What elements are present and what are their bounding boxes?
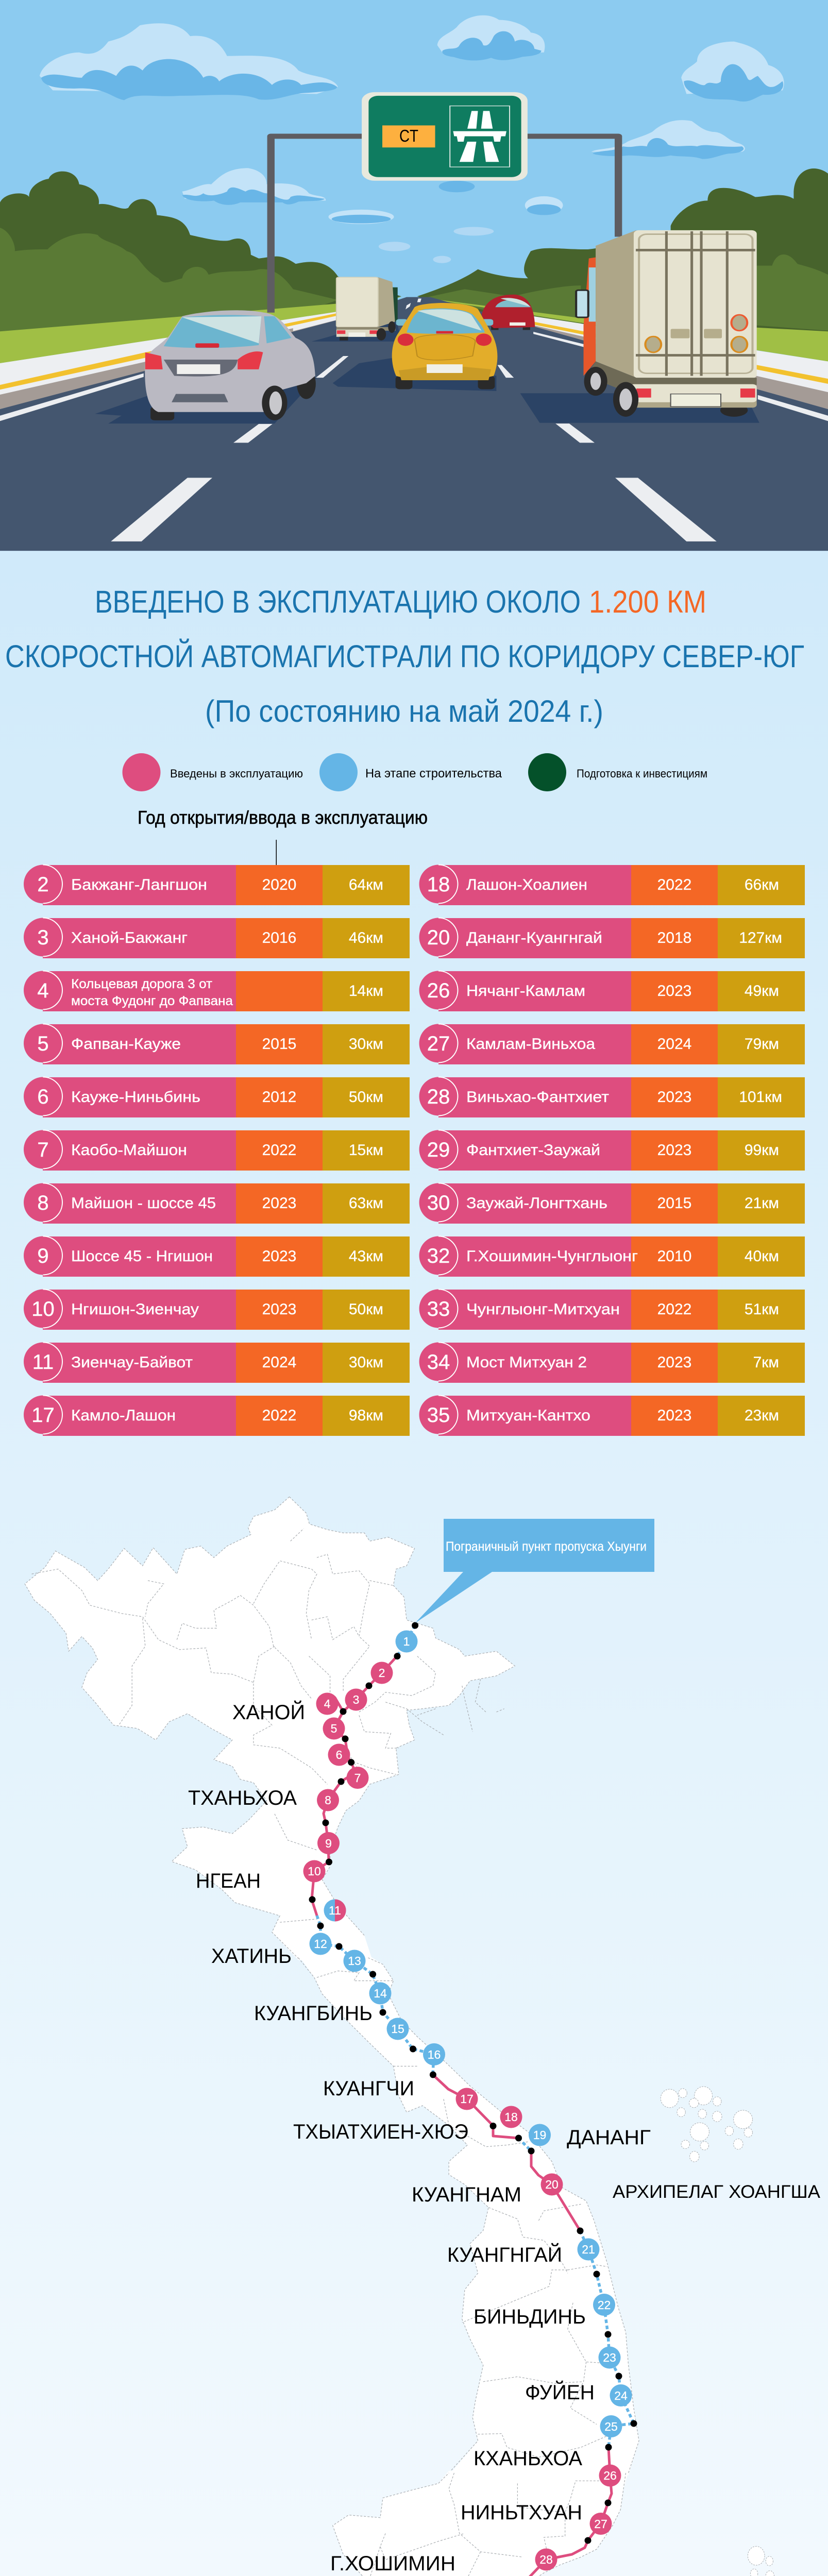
row 35 xyxy=(419,1395,805,1436)
map of Vietnam xyxy=(25,1497,814,2576)
row 30: 30 xyxy=(427,1192,450,1214)
marker 24: 24 xyxy=(614,2389,628,2402)
map section markers xyxy=(283,1630,632,2576)
islands: Truong Sa archipelago xyxy=(682,2546,814,2576)
row 4 xyxy=(24,971,410,1011)
row 4: Кольцевая дорога 3 от xyxy=(71,977,213,991)
row 9: 9 xyxy=(37,1245,49,1267)
big truck xyxy=(520,230,759,423)
row 32: 2010 xyxy=(657,1248,691,1265)
marker 25 xyxy=(600,2415,622,2437)
row 26: 49км xyxy=(745,982,779,999)
marker 6 xyxy=(328,1743,350,1766)
province labels: КУАНГЧИ xyxy=(323,2077,414,2100)
marker 19 xyxy=(529,2124,551,2146)
title: (По состоянию на май 2024 г.) xyxy=(205,694,603,728)
province labels: Г.ХОШИМИН xyxy=(330,2552,455,2575)
marker 26: 26 xyxy=(603,2469,617,2482)
row 29 xyxy=(419,1130,805,1171)
row 8: 8 xyxy=(37,1192,49,1214)
marker 18: 18 xyxy=(504,2110,518,2124)
marker 8: 8 xyxy=(325,1793,331,1807)
marker 21 xyxy=(577,2238,600,2261)
marker 22: 22 xyxy=(598,2298,611,2312)
hero illustration: highway scene xyxy=(0,0,828,551)
province labels xyxy=(188,1700,821,2576)
row 7: Каобо-Майшон xyxy=(71,1142,187,1159)
row 3 xyxy=(24,918,410,958)
row 18: Лашон-Хоалиен xyxy=(466,876,587,893)
row 18: 66км xyxy=(745,876,779,893)
row 20: 20 xyxy=(427,926,450,949)
row 8 xyxy=(24,1183,410,1224)
marker 16: 16 xyxy=(428,2048,441,2061)
marker 2: 2 xyxy=(379,1666,385,1680)
row 10 xyxy=(24,1289,410,1330)
row 17: 2022 xyxy=(262,1407,296,1424)
row 10: 50км xyxy=(349,1301,383,1318)
marker 4 xyxy=(316,1693,338,1715)
row 5 xyxy=(24,1024,410,1064)
row 29: Фантхиет-Заужай xyxy=(466,1142,600,1159)
row 26: 2023 xyxy=(657,982,691,999)
row 29: 99км xyxy=(745,1142,779,1159)
row 5: 2015 xyxy=(262,1036,296,1053)
province labels: АРХИПЕЛАГ ХОАНГША xyxy=(613,2182,821,2202)
province labels: ТХЫАТХИЕН-ХЮЭ xyxy=(293,2121,468,2143)
marker 15 xyxy=(386,2018,409,2040)
row 9: 2023 xyxy=(262,1248,296,1265)
expressway route lines xyxy=(273,1625,634,2576)
road sign CT xyxy=(362,92,528,181)
callout: Huu Nghi border gate xyxy=(415,1519,654,1623)
row 27: 27 xyxy=(427,1032,450,1055)
marker 26 xyxy=(599,2465,621,2486)
marker 25: 25 xyxy=(604,2420,618,2433)
row 6: 2012 xyxy=(262,1089,296,1106)
silver car xyxy=(95,310,317,423)
row 33 xyxy=(419,1289,805,1330)
province labels: ДАНАНГ xyxy=(567,2126,651,2149)
row 2: 2 xyxy=(37,873,49,896)
row 11 xyxy=(24,1343,410,1383)
row 34: 2023 xyxy=(657,1354,691,1371)
row 2 xyxy=(24,865,410,905)
row 5: Фапван-Кауже xyxy=(71,1036,181,1053)
marker 9 xyxy=(317,1832,340,1854)
marker 3: 3 xyxy=(353,1693,359,1706)
row 2: Бакжанг-Лангшон xyxy=(71,876,207,893)
row 11: 30км xyxy=(349,1354,383,1371)
marker 22 xyxy=(593,2294,615,2316)
row 3: 46км xyxy=(349,929,383,946)
row 28: Виньхао-Фантхиет xyxy=(466,1089,609,1106)
marker 4: 4 xyxy=(324,1697,331,1710)
marker 17: 17 xyxy=(460,2092,474,2106)
marker 12 xyxy=(309,1933,332,1955)
marker 23: 23 xyxy=(603,2351,616,2364)
row 32: 32 xyxy=(427,1245,450,1267)
marker 3 xyxy=(345,1689,367,1710)
marker 11 half pink half blue xyxy=(324,1899,346,1922)
province labels: ХАТИНЬ xyxy=(211,1945,292,1968)
province labels: НИНЬТХУАН xyxy=(461,2501,582,2524)
marker 16 xyxy=(423,2043,445,2065)
row 17: 98км xyxy=(349,1407,383,1424)
row 26 xyxy=(419,971,805,1011)
marker 15: 15 xyxy=(391,2022,404,2036)
row 11: 2024 xyxy=(262,1354,296,1371)
row 6: Кауже-Ниньбинь xyxy=(71,1089,200,1106)
row 27: 79км xyxy=(745,1036,779,1053)
marker 17 xyxy=(455,2088,478,2110)
overhead sign gantry xyxy=(271,92,618,313)
marker 28: 28 xyxy=(539,2553,553,2566)
legend: На этапе строительства xyxy=(365,767,502,781)
row 20: 2018 xyxy=(657,929,691,946)
province labels: КХАНЬХОА xyxy=(474,2447,582,2470)
legend: Введены в эксплуатацию xyxy=(170,767,303,780)
row 26: Нячанг-Камлам xyxy=(466,982,585,999)
row 3: 3 xyxy=(37,926,49,949)
red car xyxy=(482,295,535,330)
row 4: 14км xyxy=(349,982,383,999)
province labels: КУАНГНАМ xyxy=(412,2183,521,2206)
row 10: Нгишон-Зиенчау xyxy=(71,1301,199,1318)
row 11: Зиенчау-Байвот xyxy=(71,1354,193,1371)
row 29: 29 xyxy=(427,1139,450,1161)
marker 18 xyxy=(500,2106,522,2128)
row 11: 11 xyxy=(32,1351,54,1374)
row 6: 6 xyxy=(37,1086,49,1108)
row 18: 18 xyxy=(427,873,450,896)
row 32: Г.Хошимин-Чунглыонг xyxy=(466,1248,638,1265)
marker 13 xyxy=(343,1950,366,1972)
marker 8 xyxy=(317,1789,339,1811)
row 7: 7 xyxy=(37,1139,49,1161)
row 34: Мост Митхуан 2 xyxy=(466,1354,587,1371)
row 5: 30км xyxy=(349,1036,383,1053)
row 26: 26 xyxy=(427,979,450,1002)
row 17: Камло-Лашон xyxy=(71,1407,176,1424)
callout: Huu Nghi border gate: Пограничный пункт пропуска Хыунги xyxy=(446,1539,647,1554)
title xyxy=(5,584,804,728)
row 35: 2023 xyxy=(657,1407,691,1424)
marker 14 xyxy=(369,1982,392,2004)
row 27 xyxy=(419,1024,805,1064)
row 9: 43км xyxy=(349,1248,383,1265)
row 20: 127км xyxy=(739,929,782,946)
row 33: Чунглыонг-Митхуан xyxy=(466,1301,620,1318)
small truck xyxy=(312,277,401,342)
row 35: Митхуан-Кантхо xyxy=(466,1407,590,1424)
marker 7: 7 xyxy=(354,1771,361,1785)
road surface with lane markings xyxy=(0,297,828,551)
row 28: 28 xyxy=(427,1086,450,1108)
province labels: БИНЬДИНЬ xyxy=(474,2306,586,2328)
marker 10 xyxy=(303,1860,326,1883)
marker 7 xyxy=(346,1767,369,1789)
row 29: 2023 xyxy=(657,1142,691,1159)
province labels: КУАНГНГАЙ xyxy=(447,2243,562,2266)
marker 27: 27 xyxy=(594,2517,607,2531)
row 27: Камлам-Виньхоа xyxy=(466,1036,595,1053)
table: sections in operation xyxy=(24,865,805,1436)
province labels: ТХАНЬХОА xyxy=(188,1787,297,1809)
row 8: Майшон - шоссе 45 xyxy=(71,1195,216,1212)
completed route sections (pink) xyxy=(312,1656,612,2576)
tree lines xyxy=(0,168,828,340)
heading: year of opening: Год открытия/ввода в эксплуатацию xyxy=(138,807,428,828)
row 27: 2024 xyxy=(657,1036,691,1053)
marker 1 xyxy=(396,1630,417,1653)
province labels: ФУЙЕН xyxy=(525,2380,595,2404)
clouds xyxy=(40,15,784,263)
marker 24 xyxy=(610,2384,632,2406)
row 2: 2020 xyxy=(262,876,296,893)
row 17 xyxy=(24,1395,410,1436)
row 34: 7км xyxy=(753,1354,779,1371)
row 32 xyxy=(419,1236,805,1277)
marker 6: 6 xyxy=(336,1748,342,1761)
row 8: 63км xyxy=(349,1195,383,1212)
row 2: 64км xyxy=(349,876,383,893)
row 30: 21км xyxy=(745,1195,779,1212)
row 3: Ханой-Бакжанг xyxy=(71,929,188,946)
marker 27 xyxy=(589,2513,612,2535)
province labels: КУАНГБИНЬ xyxy=(254,2002,373,2025)
row 20 xyxy=(419,918,805,958)
legend: Подготовка к инвестициям xyxy=(577,767,707,780)
row 4: 4 xyxy=(37,979,49,1002)
row 34: 34 xyxy=(427,1351,450,1374)
marker 14: 14 xyxy=(374,1987,387,2000)
row 4: моста Фудонг до Фапвана xyxy=(71,994,233,1008)
row 20: Дананг-Куангнгай xyxy=(466,929,602,946)
marker 5: 5 xyxy=(331,1722,337,1735)
row 33: 33 xyxy=(427,1298,450,1320)
row 32: 40км xyxy=(745,1248,779,1265)
row 34 xyxy=(419,1343,805,1383)
row 6 xyxy=(24,1077,410,1117)
marker 23 xyxy=(599,2346,620,2369)
sections under construction (blue dashed) xyxy=(273,1625,634,2576)
row 8: 2023 xyxy=(262,1195,296,1212)
legend xyxy=(123,753,707,791)
grass and road shoulders xyxy=(0,297,828,409)
title: 1.200 КМ xyxy=(589,584,706,619)
row 10: 2023 xyxy=(262,1301,296,1318)
row 10: 10 xyxy=(31,1298,55,1320)
marker 2 xyxy=(371,1662,393,1684)
marker 9: 9 xyxy=(325,1837,332,1850)
row 9: Шоссе 45 - Нгишон xyxy=(71,1248,213,1265)
row 35: 35 xyxy=(427,1404,450,1427)
marker 28 xyxy=(535,2548,557,2571)
marker 21: 21 xyxy=(582,2243,595,2256)
marker 11 half pink half blue: 11 xyxy=(329,1904,341,1917)
row 30: 2015 xyxy=(657,1195,691,1212)
marker 19: 19 xyxy=(533,2128,546,2142)
yellow car xyxy=(333,303,497,391)
province labels: ХАНОЙ xyxy=(232,1700,305,1724)
title: ВВЕДЕНО В ЭКСПЛУАТАЦИЮ ОКОЛО xyxy=(95,584,581,619)
marker 20 xyxy=(541,2173,563,2196)
row 7 xyxy=(24,1130,410,1171)
row 28: 101км xyxy=(739,1089,782,1106)
row 33: 51км xyxy=(745,1301,779,1318)
marker 5 xyxy=(323,1718,345,1739)
row 35: 23км xyxy=(745,1407,779,1424)
marker 13: 13 xyxy=(348,1954,361,1968)
row 17: 17 xyxy=(31,1404,55,1427)
sign label CT: CT xyxy=(399,126,418,145)
islands: Hoang Sa archipelago xyxy=(661,2087,752,2162)
marker 1: 1 xyxy=(403,1635,410,1648)
row 9 xyxy=(24,1236,410,1277)
row 18: 2022 xyxy=(657,876,691,893)
row 6: 50км xyxy=(349,1089,383,1106)
row 3: 2016 xyxy=(262,929,296,946)
route junction dots xyxy=(269,1622,637,2576)
row 30: Заужай-Лонгтхань xyxy=(466,1195,607,1212)
row 7: 15км xyxy=(349,1142,383,1159)
row 33: 2022 xyxy=(657,1301,691,1318)
row 5: 5 xyxy=(37,1032,49,1055)
row 30 xyxy=(419,1183,805,1224)
province labels: НГЕАН xyxy=(196,1870,261,1892)
marker 10: 10 xyxy=(308,1865,321,1878)
marker 20: 20 xyxy=(545,2178,559,2191)
marker 12: 12 xyxy=(314,1937,327,1951)
row 7: 2022 xyxy=(262,1142,296,1159)
row 28 xyxy=(419,1077,805,1117)
row 28: 2023 xyxy=(657,1089,691,1106)
row 18 xyxy=(419,865,805,905)
